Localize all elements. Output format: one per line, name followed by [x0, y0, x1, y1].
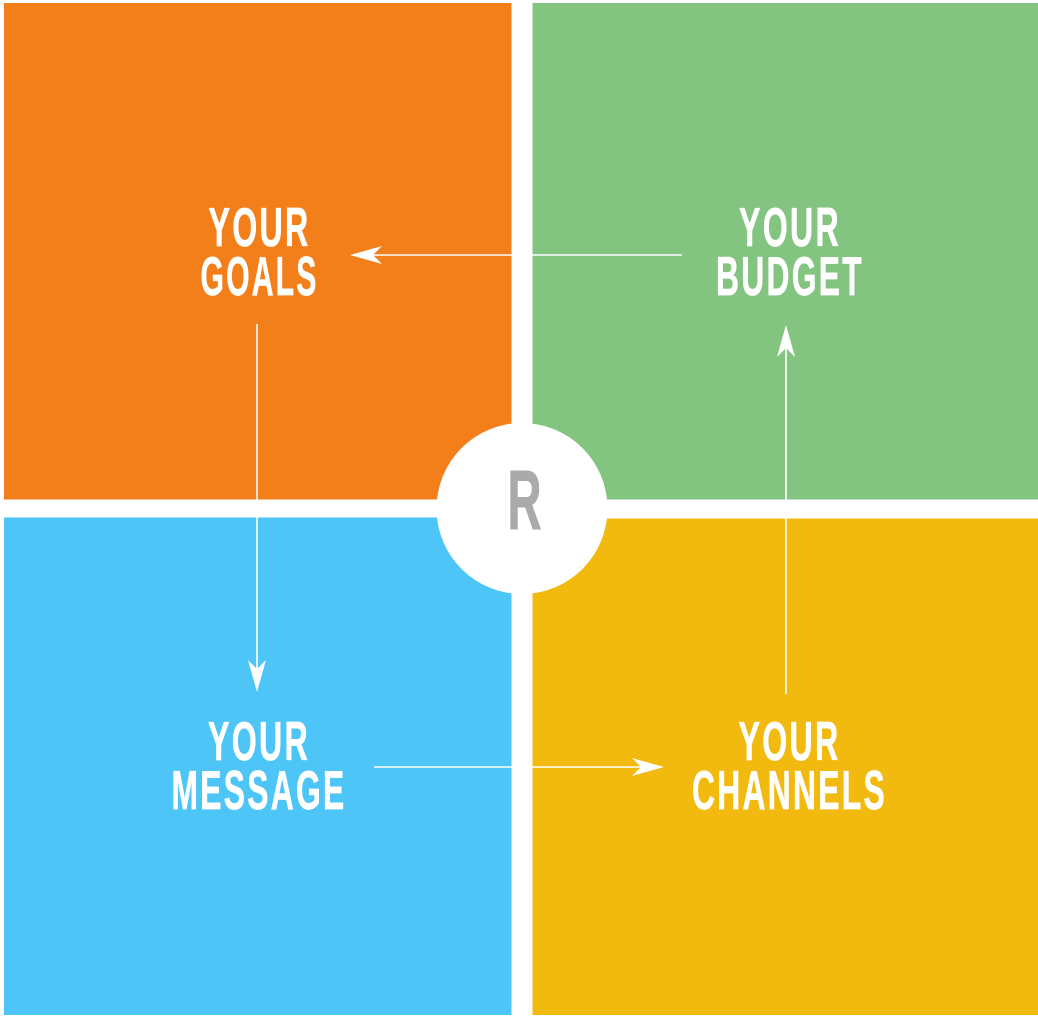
heading: your channels: YOUR [738, 710, 841, 772]
panel: your message [4, 518, 512, 1015]
heading: your budget: YOUR [739, 196, 841, 258]
arrow: message to channels [374, 758, 664, 776]
heading: your budget: BUDGET [716, 245, 864, 307]
arrow: goals to message [248, 324, 266, 692]
arrow: budget to goals [350, 246, 682, 264]
heading: your goals: GOALS [200, 245, 319, 307]
heading: your goals: YOUR [208, 196, 311, 258]
heading: your message: YOUR [208, 710, 310, 772]
panel: your channels [532, 518, 1038, 1015]
panel: your goals [4, 3, 512, 500]
center circle with R: R [508, 453, 542, 547]
arrow: channels to budget [777, 325, 795, 694]
heading: your channels: CHANNELS [692, 759, 887, 821]
center circle with R [436, 423, 608, 594]
heading: your message: MESSAGE [172, 759, 346, 821]
panel: your budget [532, 3, 1038, 500]
